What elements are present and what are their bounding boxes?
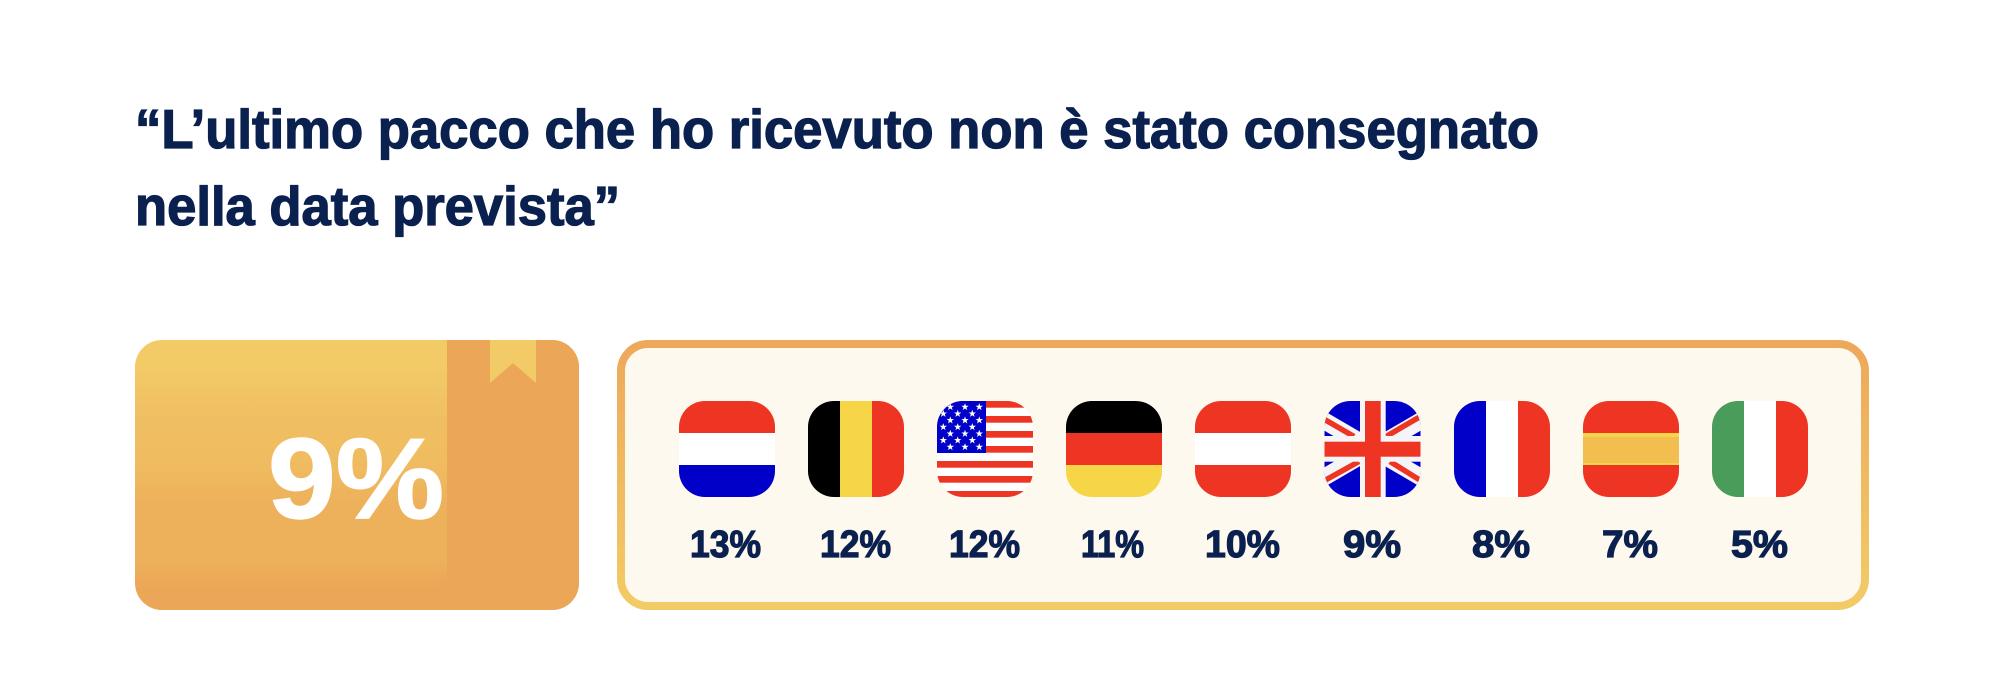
icon: package side fold	[447, 340, 579, 610]
flag: Netherlands	[679, 401, 775, 497]
label: 9%: 9%	[1343, 524, 1401, 566]
label: 13%: 13%	[690, 524, 761, 566]
label: 5%: 5%	[1731, 524, 1788, 566]
panel border and background	[621, 344, 1865, 606]
flag: United States	[937, 401, 1033, 497]
label: 8%: 8%	[1472, 524, 1530, 566]
flag: Austria	[1195, 401, 1291, 497]
panel: country flags	[621, 344, 1865, 606]
title	[135, 98, 1539, 237]
flag: Germany	[1066, 401, 1162, 497]
label: 12%: 12%	[820, 524, 891, 566]
label: 10%: 10%	[1205, 524, 1280, 566]
flag: France	[1454, 401, 1550, 497]
icon: ribbon tag	[490, 340, 536, 383]
label: 11%: 11%	[1081, 524, 1144, 566]
flag: Italy	[1712, 401, 1808, 497]
flag: Spain	[1583, 401, 1679, 497]
big percentage: 9%	[268, 416, 444, 543]
label: 12%: 12%	[949, 524, 1020, 566]
title: nella data prevista”	[135, 175, 620, 237]
panel: package card with 9%	[135, 340, 579, 610]
label: 7%: 7%	[1602, 524, 1658, 566]
title: “L’ultimo pacco che ho ricevuto non è stato consegnato	[135, 98, 1539, 160]
flag: United Kingdom	[1324, 401, 1420, 497]
flag: Belgium	[808, 401, 904, 497]
